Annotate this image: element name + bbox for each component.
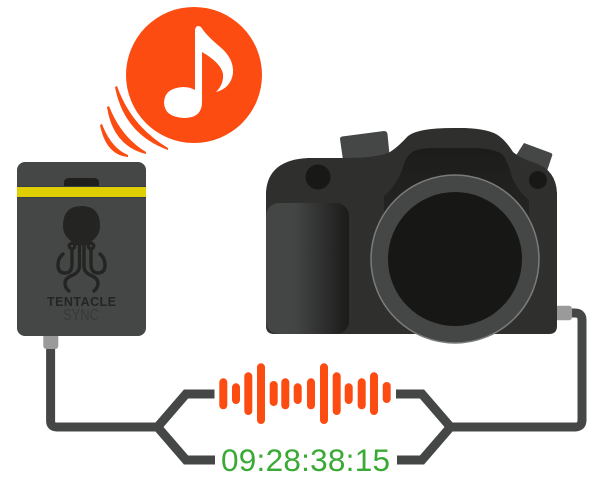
camera body xyxy=(266,128,557,334)
icon: music note badge xyxy=(126,7,262,143)
connector: camera plug xyxy=(555,306,572,320)
camera lens xyxy=(371,175,539,343)
camera xyxy=(266,128,572,343)
camera dial right xyxy=(529,171,547,189)
device: Tentacle Sync xyxy=(17,162,146,349)
icon: motion arcs xyxy=(100,86,168,157)
logo: octopus xyxy=(58,206,105,291)
microphone grille xyxy=(64,178,99,187)
logo text: SYNC: SYNC xyxy=(63,307,99,324)
camera grip xyxy=(266,203,349,334)
camera prism xyxy=(384,148,529,259)
icon: music note xyxy=(164,26,233,118)
device body xyxy=(17,162,146,336)
yellow band xyxy=(17,186,146,198)
camera button left xyxy=(340,131,390,160)
cable network xyxy=(51,313,582,460)
audio waveform xyxy=(223,367,387,420)
connector: device plug xyxy=(43,332,58,349)
timecode: 09:28:38:15 xyxy=(221,442,390,478)
camera dial left xyxy=(306,164,330,190)
camera button right xyxy=(513,143,552,171)
logo text: TENTACLE: TENTACLE xyxy=(47,295,116,309)
